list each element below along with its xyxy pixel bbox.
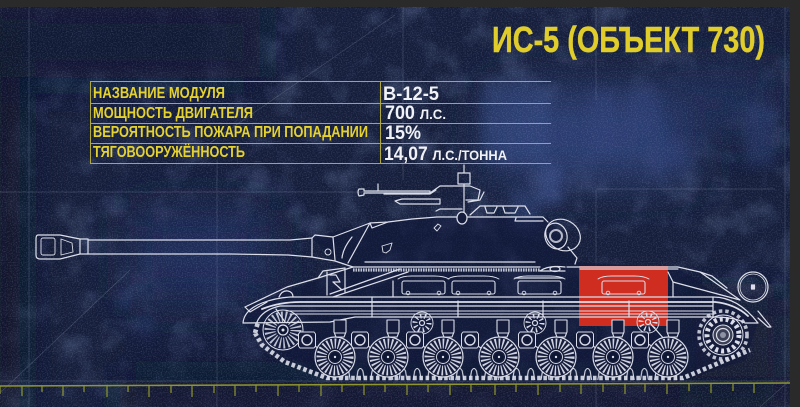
engine compartment highlight (579, 266, 668, 326)
hull and fenders (243, 278, 771, 327)
label: module name: НАЗВАНИЕ МОДУЛЯ (93, 85, 225, 102)
label: power to weight: ТЯГОВООРУЖЁННОСТЬ (93, 144, 245, 161)
ruler (0, 383, 790, 397)
return rollers small (411, 311, 659, 334)
road wheels (315, 337, 688, 377)
suspension bumpers (334, 320, 679, 337)
specs table (90, 82, 551, 165)
cupola and machine gun (358, 165, 543, 224)
fender stowage boxes (398, 276, 649, 295)
value: engine power: 700 Л.С. (385, 103, 446, 124)
front idler (263, 310, 303, 350)
suspension arms (313, 323, 665, 352)
torsion rollers (298, 332, 648, 348)
turret (312, 217, 548, 267)
tank dark silhouette (243, 217, 758, 381)
drive sprocket (699, 311, 747, 359)
hatched turret ring (353, 268, 540, 272)
tank blueprint (36, 165, 771, 380)
label: fire probability: ВЕРОЯТНОСТЬ ПОЖАРА ПРИ ПОПАДАНИИ (93, 124, 368, 141)
gun barrel (36, 235, 312, 259)
track links (255, 322, 750, 378)
rear deck (540, 266, 768, 302)
track teeth (327, 366, 683, 380)
rear turret spare roller (540, 213, 586, 264)
upper glacis (245, 267, 408, 312)
label: engine power: МОЩНОСТЬ ДВИГАТЕЛЯ (93, 105, 253, 122)
value: module name: В-12-5 (383, 84, 439, 105)
value: power to weight: 14,07 Л.С./ТОННА (384, 144, 507, 165)
value: fire probability: 15% (385, 123, 421, 144)
